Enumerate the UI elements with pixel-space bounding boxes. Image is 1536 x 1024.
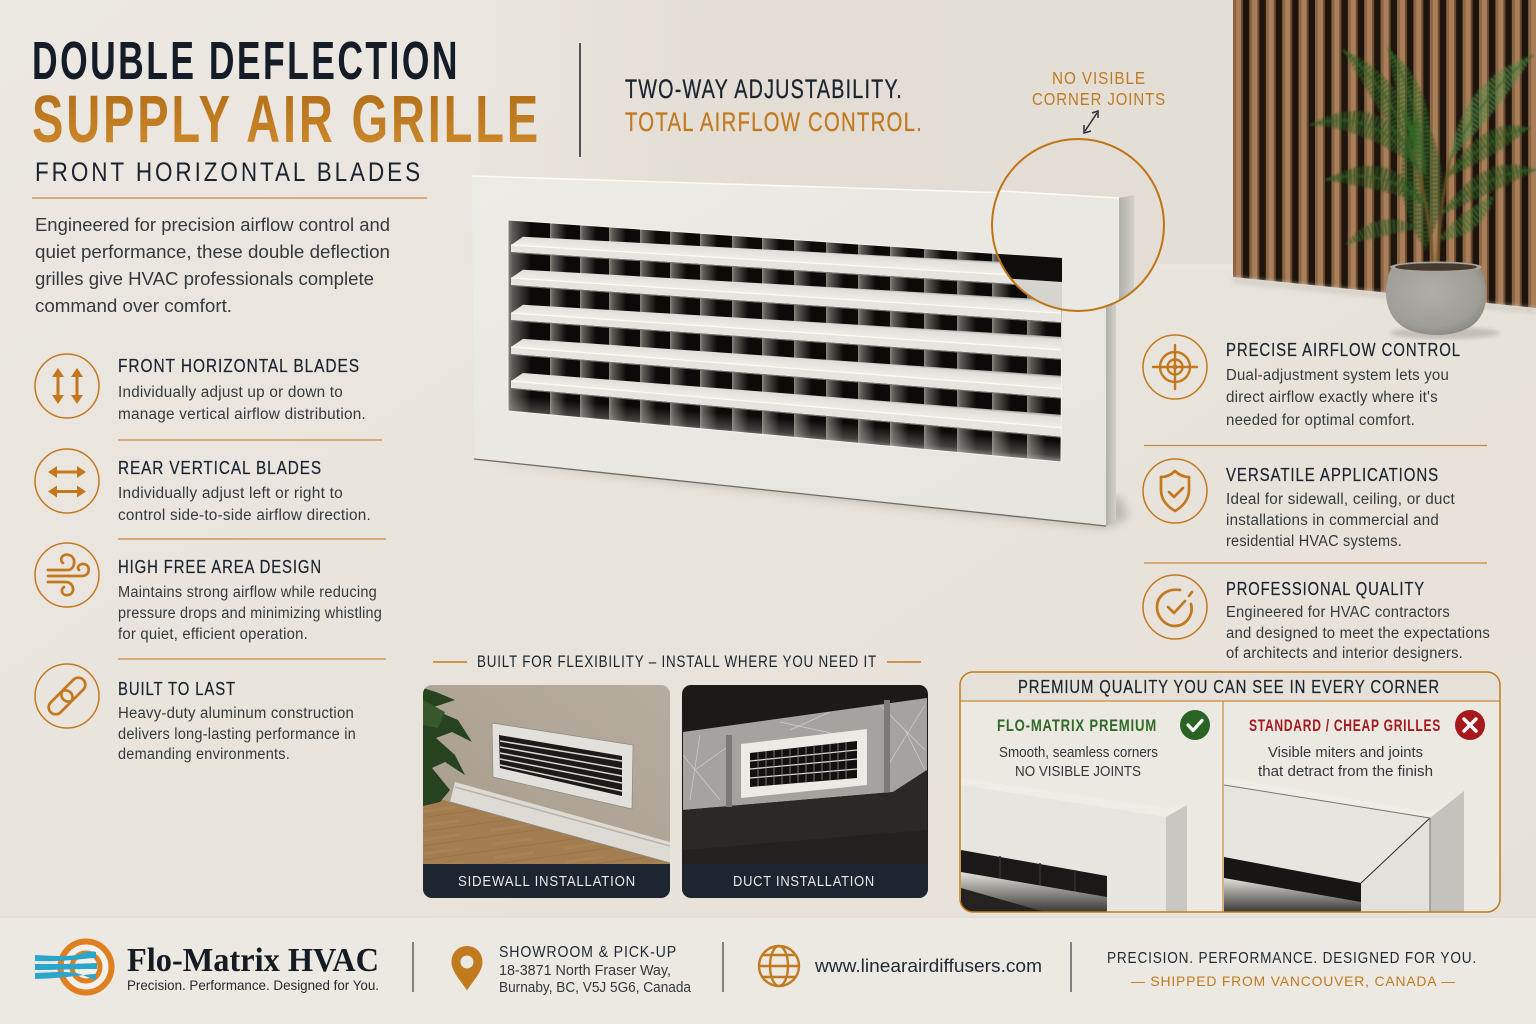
logo xyxy=(35,942,379,993)
intro paragraph xyxy=(35,214,390,316)
feature: built to last: demanding environments. xyxy=(118,746,290,763)
intro paragraph: Engineered for precision airflow control and xyxy=(35,214,390,235)
feature: built to last: delivers long-lasting performance in xyxy=(118,726,356,743)
feature: rear vertical blades: control side-to-side airflow direction. xyxy=(118,507,371,524)
icon: vertical arrows xyxy=(35,354,99,418)
icon: horizontal arrows xyxy=(35,449,99,513)
showroom address: Burnaby, BC, V5J 5G6, Canada xyxy=(499,980,692,996)
column: standard grilles: STANDARD / CHEAP GRILLES xyxy=(1249,717,1441,735)
title block xyxy=(32,31,541,187)
feature: front horizontal blades xyxy=(35,354,366,423)
feature: high free area design xyxy=(35,543,382,643)
showroom address: SHOWROOM & PICK-UP xyxy=(499,944,677,961)
column: standard grilles: Visible miters and joints xyxy=(1268,745,1423,761)
title: double deflection: DOUBLE DEFLECTION xyxy=(32,31,460,91)
column: standard grilles: that detract from the finish xyxy=(1258,764,1433,780)
feature: front horizontal blades: FRONT HORIZONTAL BLADES xyxy=(118,356,360,376)
intro paragraph: command over comfort. xyxy=(35,295,232,316)
feature: front horizontal blades: manage vertical airflow distribution. xyxy=(118,406,366,423)
caption bar: SIDEWALL INSTALLATION xyxy=(458,873,636,890)
feature: professional quality: Engineered for HVAC contractors xyxy=(1226,604,1450,621)
feature: high free area design: HIGH FREE AREA DESIGN xyxy=(118,557,322,577)
magnifier callout circle: seamless corner xyxy=(985,136,1166,320)
feature: versatile applications xyxy=(1143,459,1455,550)
caption bar xyxy=(682,864,928,898)
heading: built for flexibility: BUILT FOR FLEXIBILITY – INSTALL WHERE YOU NEED IT xyxy=(477,652,877,671)
feature: front horizontal blades: Individually adjust up or down to xyxy=(118,384,343,401)
column: standard grilles xyxy=(1249,710,1485,780)
flower pot xyxy=(1386,264,1486,335)
tagline: TWO-WAY ADJUSTABILITY. xyxy=(625,74,903,104)
feature: high free area design: for quiet, efficient operation. xyxy=(118,626,308,643)
icon: chain link xyxy=(35,664,99,728)
tagline: TOTAL AIRFLOW CONTROL. xyxy=(625,107,923,137)
feature: versatile applications: residential HVAC systems. xyxy=(1226,533,1402,550)
icon: wind xyxy=(35,543,99,607)
caption bar: DUCT INSTALLATION xyxy=(733,873,875,890)
corner photo: standard xyxy=(1224,777,1464,912)
feature: high free area design: Maintains strong airflow while reducing xyxy=(118,584,377,601)
icon: logo rings and air bands xyxy=(35,942,112,992)
icon: green check badge xyxy=(1180,710,1210,740)
icon: red x badge xyxy=(1455,710,1485,740)
right feature list xyxy=(1143,335,1490,662)
corner photo: premium xyxy=(961,805,1187,912)
main product: double deflection grille xyxy=(472,176,1128,528)
grille side edge xyxy=(1106,192,1116,526)
website: www.linearairdiffusers.com xyxy=(814,955,1042,976)
feature: versatile applications: Ideal for sidewall, ceiling, or duct xyxy=(1226,491,1455,508)
wall and floor xyxy=(423,685,670,866)
feature: precise airflow control xyxy=(1143,335,1461,429)
feature: precise airflow control: needed for optimal comfort. xyxy=(1226,412,1415,429)
icon: map pin xyxy=(452,946,482,990)
photo card: duct installation xyxy=(682,685,928,898)
feature: built to last: BUILT TO LAST xyxy=(118,679,236,699)
icon: shield check xyxy=(1143,459,1207,523)
callout: no visible corner joints: NO VISIBLE xyxy=(1052,68,1146,88)
icon: target xyxy=(1143,335,1207,399)
feature: precise airflow control: PRECISE AIRFLOW CONTROL xyxy=(1226,340,1461,360)
scene: slatted wood wall xyxy=(1233,0,1536,314)
grille opening with rear vertical blades xyxy=(508,220,1062,462)
footer slogan: PRECISION. PERFORMANCE. DESIGNED FOR YOU. xyxy=(1107,950,1477,967)
intro paragraph: quiet performance, these double deflection xyxy=(35,241,390,262)
tagline xyxy=(625,74,923,137)
feature: precise airflow control: direct airflow exactly where it's xyxy=(1226,389,1438,406)
feature: high free area design: pressure drops and minimizing whistling xyxy=(118,605,382,622)
grille frame face xyxy=(472,176,1106,526)
grille floor shadow xyxy=(476,460,1128,528)
feature: professional quality: of architects and interior designers. xyxy=(1226,645,1463,662)
icon: quality check xyxy=(1143,575,1207,639)
opening inner edge xyxy=(508,220,1062,462)
column: flo-matrix premium: FLO-MATRIX PREMIUM xyxy=(997,717,1157,735)
feature: professional quality xyxy=(1143,575,1490,662)
feature: versatile applications: installations in commercial and xyxy=(1226,512,1439,529)
duct grille xyxy=(741,729,867,798)
callout: no visible corner joints: CORNER JOINTS xyxy=(1032,89,1166,109)
footer slogan xyxy=(1107,950,1477,989)
intro paragraph: grilles give HVAC professionals complete xyxy=(35,268,374,289)
title: supply air grille: SUPPLY AIR GRILLE xyxy=(32,82,541,157)
feature: rear vertical blades: Individually adjust left or right to xyxy=(118,485,343,502)
left feature list xyxy=(35,354,386,763)
plant xyxy=(423,688,472,806)
icon: double arrow xyxy=(1084,111,1098,133)
showroom address: 18-3871 North Fraser Way, xyxy=(499,963,671,979)
column: flo-matrix premium xyxy=(997,710,1210,780)
grille frame edges xyxy=(472,176,1106,526)
footer bar xyxy=(0,917,1536,1024)
subtitle: FRONT HORIZONTAL BLADES xyxy=(35,157,423,187)
front horizontal blades xyxy=(511,232,1061,437)
feature: versatile applications: VERSATILE APPLICATIONS xyxy=(1226,465,1439,485)
panel: premium quality comparison xyxy=(960,672,1500,912)
feature: rear vertical blades: REAR VERTICAL BLADES xyxy=(118,458,322,478)
feature: built to last xyxy=(35,664,356,763)
logo: Flo-Matrix HVAC xyxy=(127,942,379,979)
feature: professional quality: PROFESSIONAL QUALITY xyxy=(1226,579,1425,599)
showroom address xyxy=(452,944,692,996)
column: flo-matrix premium: Smooth, seamless corners xyxy=(999,745,1158,761)
ceiling and duct xyxy=(682,685,928,865)
feature: professional quality: and designed to meet the expectations xyxy=(1226,625,1490,642)
feature: rear vertical blades xyxy=(35,449,371,524)
logo: Precision. Performance. Designed for You. xyxy=(127,977,379,993)
panel heading: PREMIUM QUALITY YOU CAN SEE IN EVERY CORNER xyxy=(1018,677,1440,697)
feature: built to last: Heavy-duty aluminum construction xyxy=(118,705,354,722)
wall grille xyxy=(492,723,633,809)
photo card: sidewall installation xyxy=(423,685,670,898)
column: flo-matrix premium: NO VISIBLE JOINTS xyxy=(1015,764,1141,780)
website xyxy=(759,946,1042,986)
feature: precise airflow control: Dual-adjustment system lets you xyxy=(1226,367,1449,384)
icon: globe xyxy=(759,946,799,986)
callout: no visible corner joints xyxy=(1032,68,1166,133)
caption bar xyxy=(423,864,670,898)
scene: potted palm plant xyxy=(1310,48,1536,339)
footer slogan: — SHIPPED FROM VANCOUVER, CANADA — xyxy=(1131,973,1456,989)
